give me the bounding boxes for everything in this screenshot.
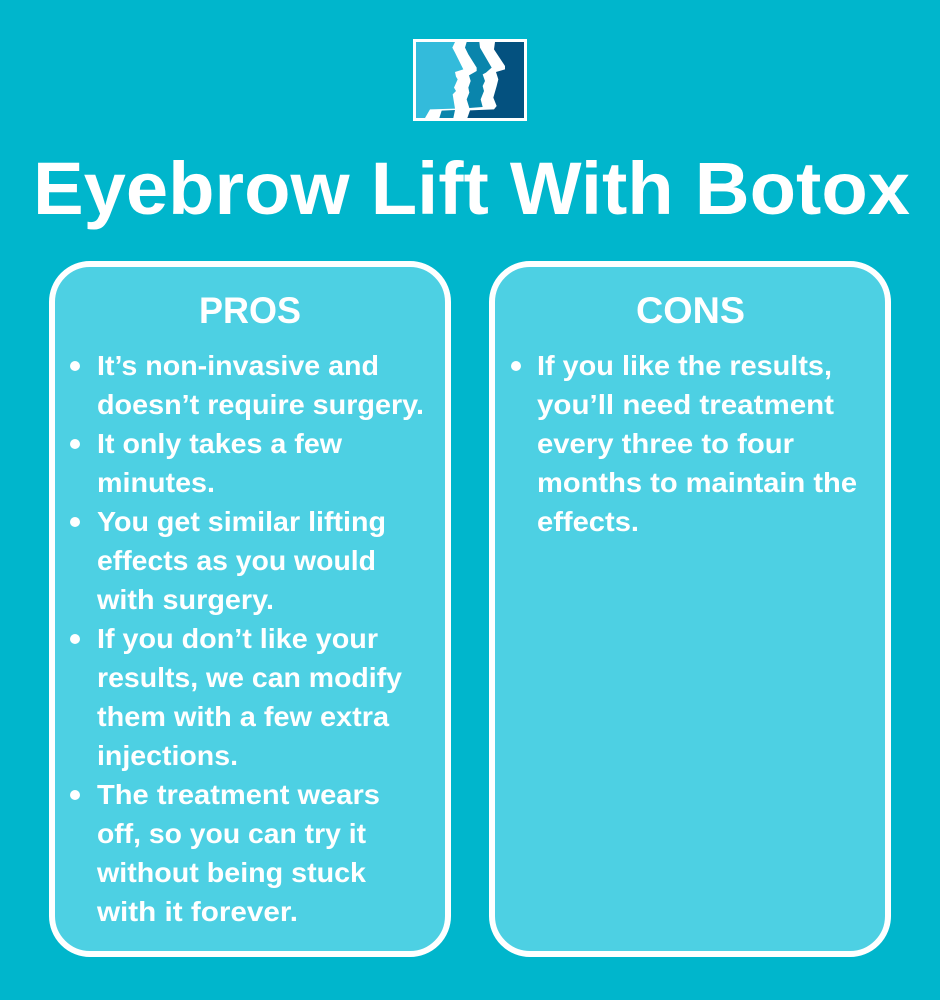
list: pros bullets: off, so you can try it [97,818,366,849]
list: pros bullets: You get similar lifting [97,506,386,537]
list: pros bullets: effects as you would [97,545,376,576]
list: pros bullets: minutes. [97,467,215,498]
list: cons bullets: you’ll need treatment [537,389,834,420]
list: pros bullets: injections. [97,740,238,771]
icon: logo with overlapping face profiles [413,39,527,121]
list: pros bullets: It only takes a few [97,428,342,459]
title: Eyebrow Lift With Botox [33,147,910,230]
list: pros bullets: with surgery. [96,584,274,615]
heading: pros: PROS [199,290,301,331]
panel: pros [52,264,448,954]
list: pros bullets: It’s non-invasive and [97,350,379,381]
list: cons bullets: every three to four [537,428,794,459]
heading: cons: CONS [636,290,745,331]
panel: cons [492,264,888,954]
list: cons bullets [511,350,857,537]
list: pros bullets: without being stuck [96,857,366,888]
list: pros bullets: results, we can modify [97,662,402,693]
list: pros bullets: The treatment wears [97,779,380,810]
list: pros bullets: doesn’t require surgery. [97,389,424,420]
list: cons bullets: If you like the results, [537,350,832,381]
list: cons bullets: months to maintain the [537,467,857,498]
list: cons bullets: effects. [537,506,639,537]
list: pros bullets [70,350,424,927]
list: pros bullets: If you don’t like your [97,623,378,654]
list: pros bullets: them with a few extra [97,701,389,732]
list: pros bullets: with it forever. [96,896,298,927]
